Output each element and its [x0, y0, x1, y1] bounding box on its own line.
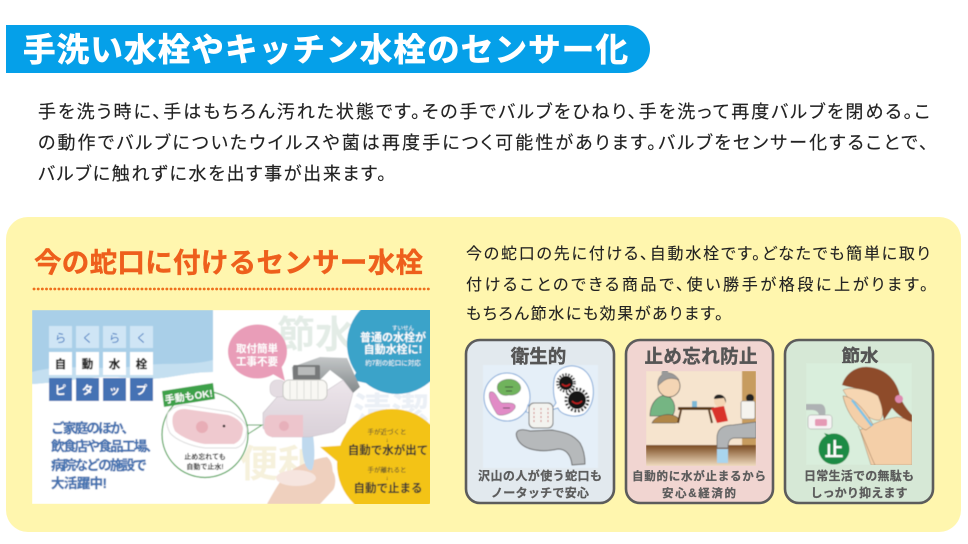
card caption [804, 468, 914, 500]
tile grid: product name: ら [109, 332, 120, 345]
hand and water [267, 435, 335, 504]
tile grid: product name: タ [82, 384, 93, 397]
callout: any faucet [346, 310, 430, 395]
tile grid: product name: 水 [109, 357, 121, 371]
product description text [466, 245, 930, 323]
tile grid: product name: ッ [109, 385, 120, 397]
title text: 手洗い水栓やキッチン水栓のセンサー化 [23, 32, 628, 68]
icon: woman washing face [806, 363, 912, 465]
product description text: もちろん節水にも効果があります。 [466, 305, 723, 323]
heading: product name: 今の蛇口に付けるセンサー水栓 [34, 247, 424, 278]
callout: auto on/off [320, 408, 430, 504]
product description text: 今の蛇口の先に付ける、自動水栓です。どなたでも簡単に取り [466, 245, 930, 263]
tile grid: product name: ピ [55, 384, 66, 397]
intro text block [38, 101, 930, 184]
blue usage text [51, 420, 159, 491]
callout: auto on/off: 手が近づくと [368, 427, 406, 436]
title banner [6, 25, 650, 73]
card heading: 衛生的 [511, 346, 566, 367]
card: hygiene [466, 340, 614, 503]
tile grid: product name: 自 [55, 357, 66, 371]
callout: any faucet: 普通の水栓が [360, 330, 426, 344]
icon: woman washing face: 止 [824, 439, 844, 461]
callout: manual operation: 手動もOK! [164, 387, 214, 406]
icon: germs and faucet [483, 365, 598, 468]
callout: manual operation: 止め忘れても [184, 452, 226, 461]
card caption [478, 468, 602, 500]
callout: any faucet: すいせん [392, 325, 414, 332]
tile grid: product name: 動 [82, 357, 93, 371]
card heading: 止め忘れ防止 [644, 346, 758, 367]
blue usage text: 大活躍中! [51, 475, 107, 491]
callout: auto on/off: 自動で止まる [354, 481, 422, 495]
tile grid: product name: 栓 [136, 357, 148, 371]
watermark words: 清潔 [353, 392, 429, 434]
tile grid: product name: く [136, 333, 147, 345]
tile grid: product name: く [82, 333, 93, 345]
panel: yellow product section [6, 217, 961, 532]
card heading: 節水 [841, 346, 879, 367]
card caption: 安心&経済的 [662, 486, 736, 500]
intro text block: バルブに触れずに水を出す事が出来ます。 [38, 163, 386, 184]
callout: easy install: 取付簡単 [236, 342, 278, 355]
card caption: 日常生活での無駄も [804, 468, 914, 483]
watermark words: 節水 [277, 315, 353, 357]
callout: auto on/off: 手が離れると [368, 465, 406, 474]
card caption [632, 469, 766, 500]
card caption: しっかり抑えます [810, 485, 908, 500]
blue usage text: 病院などの施設で [51, 457, 147, 473]
callout: any faucet: 自動水栓に! [364, 342, 422, 356]
card caption: 沢山の人が使う蛇口も [478, 468, 602, 483]
intro text block: の動作でバルブについたウイルスや菌は再度手につく可能性があります。バルブをセンサー化することで、 [38, 132, 928, 153]
card caption: 自動的に水が止まるから [632, 469, 766, 483]
callout: any faucet: 約7割の蛇口に対応 [365, 358, 421, 367]
callout: auto on/off: 自動で水が出て [348, 443, 428, 457]
watermark words: 便利 [240, 444, 316, 486]
callout: auto on/off: ↓ [386, 438, 388, 444]
intro text block: 手を洗う時に、手はもちろん汚れた状態です。その手でバルブをひねり、手を洗って再度バルブを閉める。こ [38, 101, 930, 122]
card: prevents forgetting [626, 340, 773, 503]
faucet attachment [263, 357, 360, 437]
callout: auto on/off: ↓ [386, 476, 388, 482]
tile grid: product name: プ [136, 384, 148, 397]
callout: manual operation: 自動で止水! [186, 462, 224, 471]
card caption: ノータッチで安心 [491, 485, 589, 500]
icon: grandmother, child, running faucet [646, 370, 756, 466]
product description text: 付けることのできる商品で、使い勝手が格段に上がります。 [466, 276, 928, 294]
callout: manual operation [162, 383, 262, 478]
watermark words [240, 315, 429, 486]
callout: easy install: 工事不要 [236, 355, 278, 368]
product photo panel [32, 310, 430, 504]
card: saves water [785, 340, 933, 503]
callout: easy install [228, 324, 287, 381]
tile grid: product name: ら [55, 332, 66, 345]
blue usage text: ご家庭のほか、 [51, 420, 135, 436]
blue usage text: 飲食店や食品工場、 [51, 438, 159, 454]
tile grid: product name [49, 326, 153, 401]
